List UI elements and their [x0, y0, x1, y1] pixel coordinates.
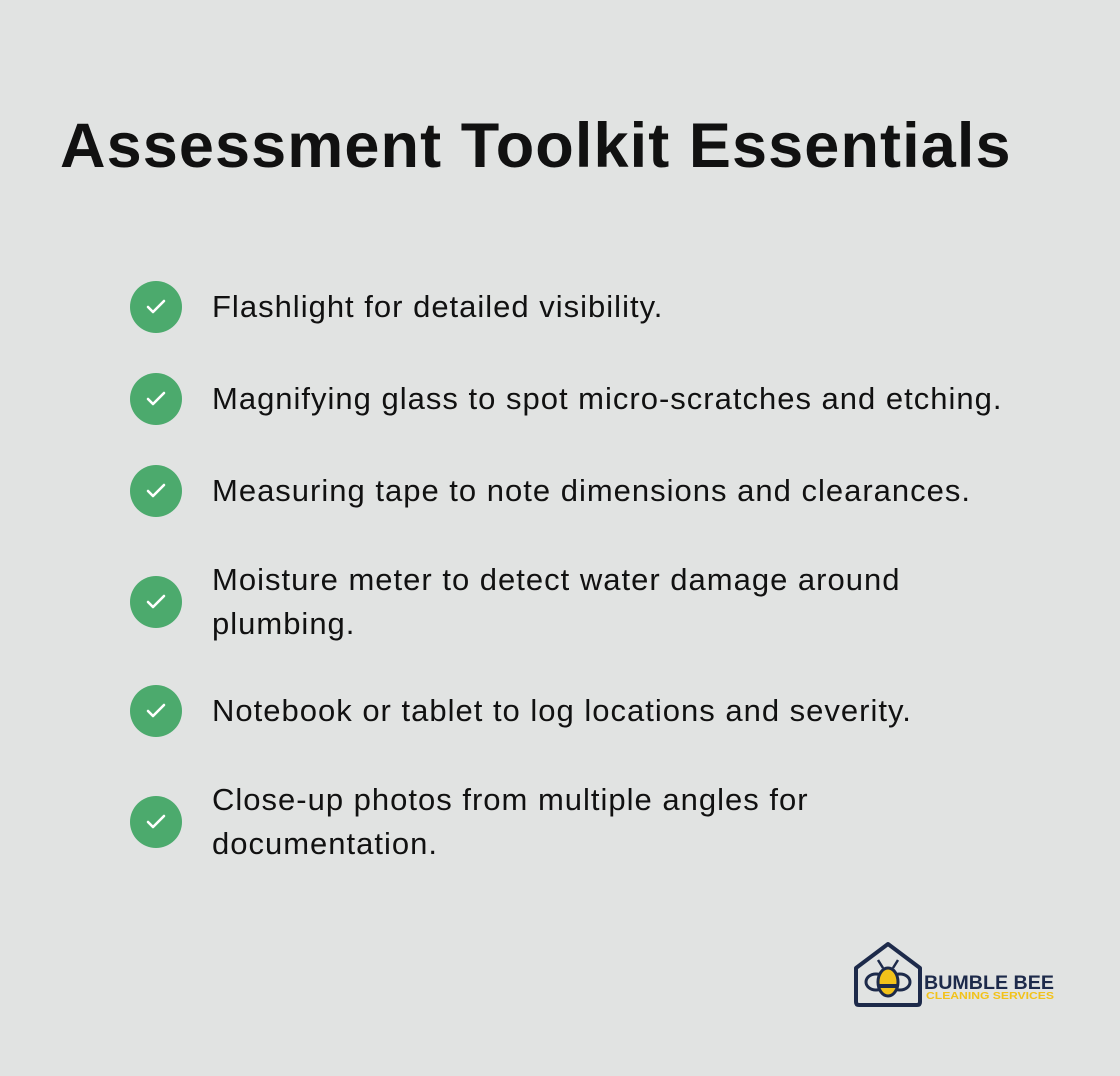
- item 4: [130, 562, 900, 641]
- item 1: Flashlight for detailed visibility.: [212, 289, 663, 324]
- item 5: Notebook or tablet to log locations and severity.: [212, 693, 912, 728]
- item 1: [130, 281, 663, 333]
- item 6: documentation.: [212, 826, 438, 861]
- item 4: plumbing.: [212, 606, 355, 641]
- item 6: Close-up photos from multiple angles for: [212, 782, 809, 817]
- title: Assessment Toolkit Essentials: [60, 111, 1012, 181]
- item 6: [130, 782, 809, 861]
- logo: [854, 942, 1054, 1007]
- item 2: Magnifying glass to spot micro-scratches and etching.: [212, 381, 1002, 416]
- item 4: Moisture meter to detect water damage around: [212, 562, 900, 597]
- logo: BUMBLE BEE: [924, 973, 1054, 994]
- item 5: [130, 685, 912, 737]
- logo: CLEANING SERVICES: [926, 990, 1054, 1002]
- item 3: Measuring tape to note dimensions and clearances.: [212, 473, 971, 508]
- item 3: [130, 465, 971, 517]
- item 2: [130, 373, 1002, 425]
